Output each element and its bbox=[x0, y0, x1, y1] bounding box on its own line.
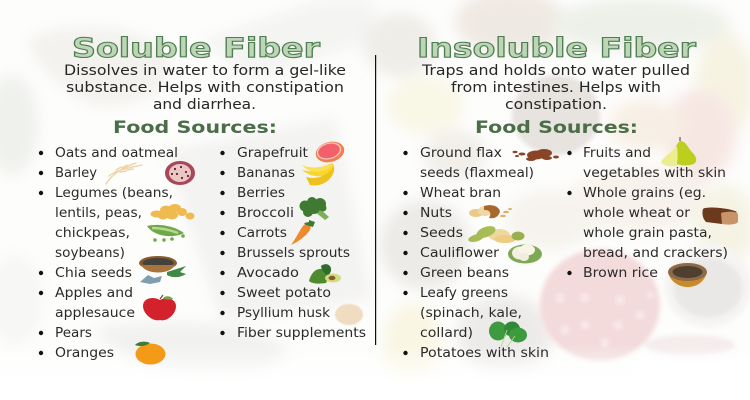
list: soluble column two: Brussels sprouts bbox=[237, 246, 350, 261]
description: soluble fiber: substance. Helps with constipation bbox=[66, 80, 344, 96]
icon: grapefruit bbox=[313, 139, 347, 165]
list: soluble column two: Bananas bbox=[237, 166, 295, 181]
icon: orange bbox=[135, 342, 166, 364]
list: insoluble column two: bread, and crackers) bbox=[583, 246, 728, 261]
list: soluble column two: Broccoli bbox=[237, 206, 294, 221]
heading: food sources, soluble: Food Sources: bbox=[113, 118, 277, 138]
list: insoluble column one: Green beans bbox=[420, 266, 509, 281]
heading: food sources, insoluble: Food Sources: bbox=[475, 118, 638, 138]
list: soluble column one: Chia seeds bbox=[55, 266, 132, 281]
icon: seeds bbox=[467, 224, 524, 243]
icon: bananas bbox=[302, 163, 334, 186]
list: insoluble column one: Cauliflower bbox=[420, 246, 500, 261]
list: insoluble column one: Nuts bbox=[420, 206, 452, 221]
list: soluble column one: Legumes (beans, bbox=[55, 186, 173, 201]
icon: flax seeds bbox=[512, 149, 559, 161]
list: insoluble column two bbox=[567, 146, 728, 281]
list: insoluble column one: collard) bbox=[420, 326, 473, 341]
list: soluble column one: Barley bbox=[55, 166, 97, 181]
list: insoluble column one: Ground flax bbox=[420, 146, 502, 161]
description: soluble fiber: and diarrhea. bbox=[153, 97, 256, 113]
list: soluble column one: Apples and bbox=[55, 286, 133, 301]
list: soluble column one: applesauce bbox=[55, 306, 135, 321]
list: insoluble column one: Leafy greens bbox=[420, 286, 508, 301]
list: soluble column two: Carrots bbox=[237, 226, 287, 241]
icon: bread bbox=[702, 208, 738, 225]
description: soluble fiber bbox=[64, 63, 346, 113]
icon: fig slice bbox=[165, 161, 195, 185]
list: insoluble column one: Potatoes with skin bbox=[420, 346, 549, 361]
list: soluble column two: Berries bbox=[237, 186, 285, 201]
description: insoluble fiber: from intestines. Helps with bbox=[451, 80, 661, 96]
list: soluble column one: soybeans) bbox=[55, 246, 125, 261]
icon: avocado bbox=[309, 264, 341, 284]
icon: spinach bbox=[489, 322, 527, 347]
list: insoluble column one: seeds (flaxmeal) bbox=[420, 166, 534, 181]
list: soluble column two: Sweet potato bbox=[237, 286, 331, 301]
list: soluble column one: Oats and oatmeal bbox=[55, 146, 178, 161]
icon: cauliflower bbox=[508, 244, 542, 264]
list: soluble column two: Grapefruit bbox=[237, 146, 308, 161]
icon: brown rice bowl bbox=[668, 263, 707, 287]
icon: pear bbox=[661, 137, 696, 166]
list: insoluble column one: Wheat bran bbox=[420, 186, 501, 201]
icon: chia seeds bowl bbox=[139, 256, 186, 284]
icon: apple bbox=[143, 295, 176, 320]
list: soluble column one: lentils, peas, bbox=[55, 206, 142, 221]
list: soluble column one: Oranges bbox=[55, 346, 114, 361]
list: soluble column one: chickpeas, bbox=[55, 226, 130, 241]
list: insoluble column two: Whole grains (eg. bbox=[583, 186, 706, 201]
description: insoluble fiber: constipation. bbox=[505, 97, 607, 113]
icon: broccoli bbox=[300, 197, 329, 220]
description: insoluble fiber bbox=[421, 63, 690, 113]
list: soluble column one: Pears bbox=[55, 326, 92, 341]
title: Soluble Fiber: Soluble Fiber bbox=[72, 33, 321, 64]
list: insoluble column one: (spinach, kale, bbox=[420, 306, 522, 321]
icon: nuts bbox=[469, 205, 512, 218]
icon: carrot bbox=[291, 220, 315, 245]
list: soluble column two bbox=[220, 146, 366, 341]
title: Insoluble Fiber: Insoluble Fiber bbox=[417, 33, 697, 64]
list: insoluble column two: Fruits and bbox=[583, 146, 651, 161]
icon: chickpeas bbox=[150, 204, 194, 220]
list: soluble column two: Fiber supplements bbox=[237, 326, 366, 341]
list: soluble column two: Avocado bbox=[237, 266, 299, 281]
description: soluble fiber: Dissolves in water to form a gel-like bbox=[64, 63, 346, 79]
list: soluble column two: Psyllium husk bbox=[237, 306, 330, 321]
divider line bbox=[375, 55, 376, 345]
icon: peas in a pod bbox=[147, 225, 185, 242]
list: insoluble column one: Seeds bbox=[420, 226, 463, 241]
list: insoluble column two: whole grain pasta, bbox=[583, 226, 712, 241]
list: insoluble column two: vegetables with skin bbox=[583, 166, 726, 181]
icon: psyllium husk bbox=[335, 304, 363, 325]
list: insoluble column one bbox=[403, 146, 549, 361]
list: insoluble column two: Brown rice bbox=[583, 266, 658, 281]
icon: barley bbox=[106, 163, 142, 184]
list: insoluble column two: whole wheat or bbox=[583, 206, 691, 221]
description: insoluble fiber: Traps and holds onto water pulled bbox=[421, 63, 690, 79]
list: soluble column one bbox=[39, 146, 178, 361]
